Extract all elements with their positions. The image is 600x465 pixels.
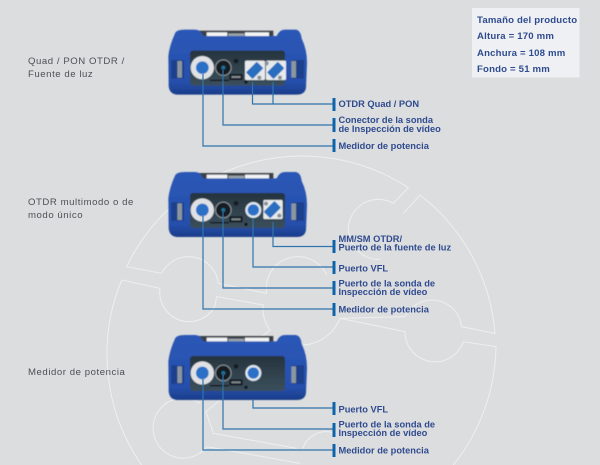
callout: Puerto de la sonda 2: Inspección de vídeo [338, 428, 428, 438]
heading: Quad / PON OTDR: Fuente de luz [28, 69, 93, 80]
callout: MM/SM OTDR: Puerto de la fuente de luz [338, 242, 451, 252]
callout: Conector de la sonda: de Inspección de vídeo [338, 124, 441, 134]
product size box: Altura = 170 mm [477, 31, 554, 42]
callout: Puerto de la sonda 1 [223, 212, 435, 297]
background: white puzzle circle outline [107, 156, 496, 465]
product size box: Anchura = 108 mm [477, 48, 565, 59]
callout: Medidor de potencia 1: Medidor de potencia [338, 141, 430, 151]
callout: Medidor de potencia 3: Medidor de potencia [338, 446, 430, 456]
product size box [472, 8, 580, 78]
callout: Conector de la sonda: Conector de la sonda [338, 115, 433, 125]
callout: Puerto VFL 2: Puerto VFL [338, 404, 388, 414]
callout: Medidor de potencia 2 [203, 216, 430, 316]
callout: Puerto VFL 1 [253, 218, 388, 274]
device 1: quad PON OTDR [168, 30, 307, 95]
callout: Puerto VFL 2 [253, 400, 388, 415]
heading: OTDR multimodo: OTDR multimodo o de [28, 197, 134, 208]
callout: MM/SM OTDR: MM/SM OTDR/ [338, 234, 402, 244]
callout: Conector de la sonda [223, 70, 441, 134]
heading: Quad / PON OTDR: Quad / PON OTDR / [28, 56, 125, 67]
callout: Medidor de potencia 3 [203, 379, 430, 457]
callout: Puerto de la sonda 1: Inspección de vídeo [338, 287, 428, 297]
callout: Puerto de la sonda 1: Puerto de la sonda de [338, 278, 435, 288]
callout: OTDR Quad / PON [252, 82, 419, 111]
callout: Puerto de la sonda 2: Puerto de la sonda de [338, 420, 435, 430]
callout: Puerto de la sonda 2 [223, 375, 435, 438]
heading: Medidor de potencia: Medidor de potencia [28, 367, 125, 378]
device 3: power meter [168, 335, 307, 400]
device 2: OTDR multimode or single mode [168, 172, 307, 237]
product size box: Fondo = 51 mm [477, 64, 550, 75]
heading: OTDR multimodo: modo único [28, 210, 83, 221]
callout: Medidor de potencia 1 [203, 74, 430, 152]
callout: OTDR Quad / PON: OTDR Quad / PON [338, 99, 419, 109]
product size box: Tamaño del producto [477, 15, 577, 26]
callout: Puerto VFL 1: Puerto VFL [338, 264, 388, 274]
callout: Medidor de potencia 2: Medidor de potencia [338, 304, 430, 314]
callout: MM/SM OTDR [273, 222, 451, 253]
